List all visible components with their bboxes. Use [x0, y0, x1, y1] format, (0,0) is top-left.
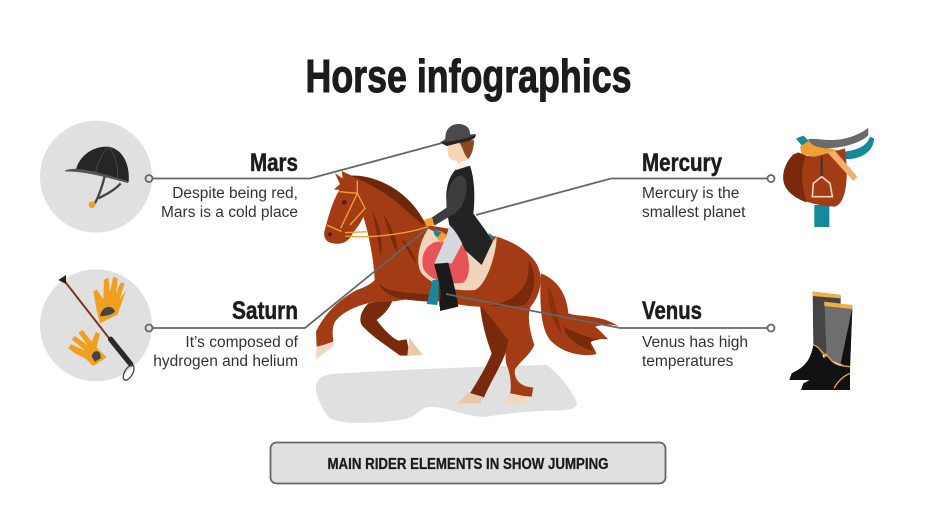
mane: [350, 176, 425, 225]
far front hoof: [407, 337, 423, 356]
far hind hoof: [458, 393, 483, 403]
near hind hoof: [503, 393, 527, 403]
rider hand: [424, 217, 434, 227]
far front leg: [360, 298, 410, 356]
icon: boots: [789, 292, 852, 390]
ground shadow: [316, 365, 577, 423]
horse body: [316, 171, 541, 397]
rider breeches: [434, 225, 463, 263]
heading: Venus: Venus: [642, 297, 702, 325]
icon: saddle: [783, 128, 874, 227]
horse eye and nostril: [328, 200, 347, 236]
far hind leg: [468, 305, 509, 397]
title: Horse infographics: [306, 50, 632, 102]
body shading: [378, 260, 534, 307]
text: Venus description: Venus has high: [642, 334, 748, 351]
rider head: [447, 142, 468, 163]
rider hat: [440, 124, 476, 146]
panel: Saturn: [153, 297, 299, 370]
connector: Mercury: [476, 175, 774, 215]
icon: helmet: [40, 121, 152, 233]
bridle and reins: [327, 181, 428, 237]
heading: Mars: Mars: [250, 149, 298, 177]
text: Mars description: Despite being red,: [172, 185, 298, 202]
heading: Mercury: Mercury: [642, 149, 722, 177]
icon: whip and gloves: [40, 269, 152, 382]
stirrup strap: [438, 285, 447, 307]
neck shading: [372, 210, 417, 264]
rider arm: [432, 176, 467, 226]
panel: Mercury: [642, 149, 746, 221]
text: Mercury description: Mercury is the: [642, 185, 739, 202]
connector: Mars: [146, 143, 442, 182]
text: Mercury description: smallest planet: [642, 204, 746, 221]
caption box: [270, 442, 666, 484]
text: Mars description: Mars is a cold place: [161, 204, 298, 221]
heading: Saturn: Saturn: [232, 297, 298, 325]
saddle pad: [418, 228, 497, 290]
text: Venus description: temperatures: [642, 353, 734, 370]
rider boot: [434, 263, 458, 311]
horse and rider illustration: [316, 124, 618, 423]
saddle cushion: [422, 242, 469, 283]
tail: [540, 273, 618, 355]
saddle knot: [434, 229, 447, 243]
panel: Mars: [161, 149, 298, 221]
rider collar: [456, 162, 470, 170]
connector: Venus: [446, 294, 774, 332]
panel: Venus: [642, 297, 748, 370]
connector: Saturn: [146, 228, 428, 332]
front hoof: [316, 342, 334, 359]
text: Saturn description: It’s composed of: [185, 334, 299, 351]
teal strap: [427, 280, 441, 305]
caption text: MAIN RIDER ELEMENTS IN SHOW JUMPING: [328, 456, 608, 473]
text: Saturn description: hydrogen and helium: [153, 353, 298, 370]
rider jacket: [446, 166, 493, 265]
rider hair: [458, 140, 474, 159]
